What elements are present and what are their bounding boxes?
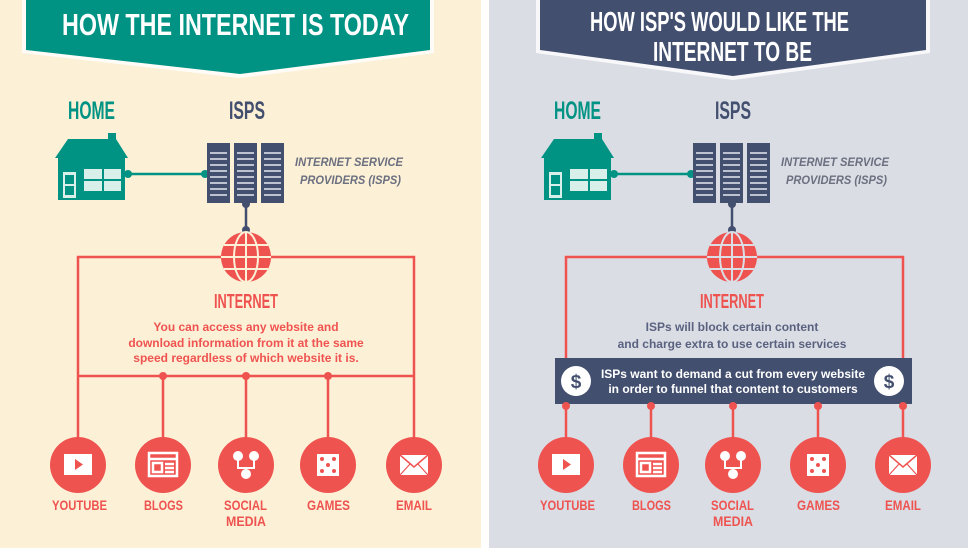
labels: EMAIL [396, 497, 432, 513]
icon: house [55, 133, 128, 200]
panel: right services [538, 437, 931, 529]
labels: YOUTUBE [52, 497, 107, 513]
text: description: and charge extra to use certain services [618, 337, 847, 351]
icon: house [541, 133, 614, 200]
icon: social [720, 451, 746, 479]
labels: MEDIA [226, 513, 266, 529]
panel: left diagram: PROVIDERS (ISPS) [300, 173, 401, 187]
left banner: HOW THE INTERNET IS TODAY [62, 7, 409, 42]
labels: SOCIAL [711, 497, 754, 513]
icon: globe [707, 232, 757, 282]
text: description: You can access any website and [153, 320, 339, 334]
text: description [618, 320, 847, 351]
icon: social [233, 451, 259, 479]
callout: toll box: $ [571, 372, 582, 393]
heading: home: HOME [554, 97, 601, 125]
text: description [128, 320, 364, 365]
heading: internet: INTERNET [700, 291, 764, 313]
icon: email [400, 455, 428, 475]
network lines [78, 257, 414, 440]
network lines [566, 257, 903, 440]
icon: blog [637, 453, 665, 476]
panel: left diagram [55, 97, 414, 440]
text: isp description: INTERNET SERVICE [781, 155, 890, 169]
labels: GAMES [797, 497, 840, 513]
left banner [22, 0, 434, 78]
labels: GAMES [307, 497, 350, 513]
icon: servers [207, 143, 284, 203]
heading: home: HOME [68, 97, 115, 125]
panel: right diagram: PROVIDERS (ISPS) [786, 173, 887, 187]
icon: servers [693, 143, 770, 203]
labels [540, 497, 921, 529]
callout: toll box: in order to funnel that content to customers [608, 382, 858, 396]
right banner [536, 0, 930, 80]
callout: toll box: $ [884, 372, 895, 393]
text: description: speed regardless of which website it is. [133, 351, 359, 365]
heading: isps: ISPS [229, 97, 265, 125]
heading: isps: ISPS [715, 97, 751, 125]
icon: dice [317, 454, 339, 476]
labels: YOUTUBE [540, 497, 595, 513]
text: isp description: INTERNET SERVICE [295, 155, 404, 169]
labels: EMAIL [885, 497, 921, 513]
panel: right diagram [541, 97, 912, 440]
labels [52, 497, 432, 529]
panel: left background [0, 0, 481, 548]
icon: youtube [64, 454, 92, 475]
panel: right background [489, 0, 968, 548]
text: description: download information from it at the same [128, 336, 364, 350]
callout: toll box: ISPs want to demand a cut from every website [601, 367, 865, 381]
labels: MEDIA [713, 513, 753, 529]
icon: blog [149, 453, 177, 476]
panel: left services [50, 437, 442, 529]
labels: BLOGS [632, 497, 671, 513]
text: description: ISPs will block certain content [646, 320, 818, 334]
labels: BLOGS [144, 497, 183, 513]
labels: SOCIAL [224, 497, 267, 513]
callout: toll box [555, 358, 912, 404]
heading: internet: INTERNET [214, 291, 278, 313]
right banner: INTERNET TO BE [653, 36, 812, 67]
icon: youtube [552, 454, 580, 475]
icon: dice [807, 454, 829, 476]
icon: globe [221, 232, 271, 282]
icon: email [889, 455, 917, 475]
